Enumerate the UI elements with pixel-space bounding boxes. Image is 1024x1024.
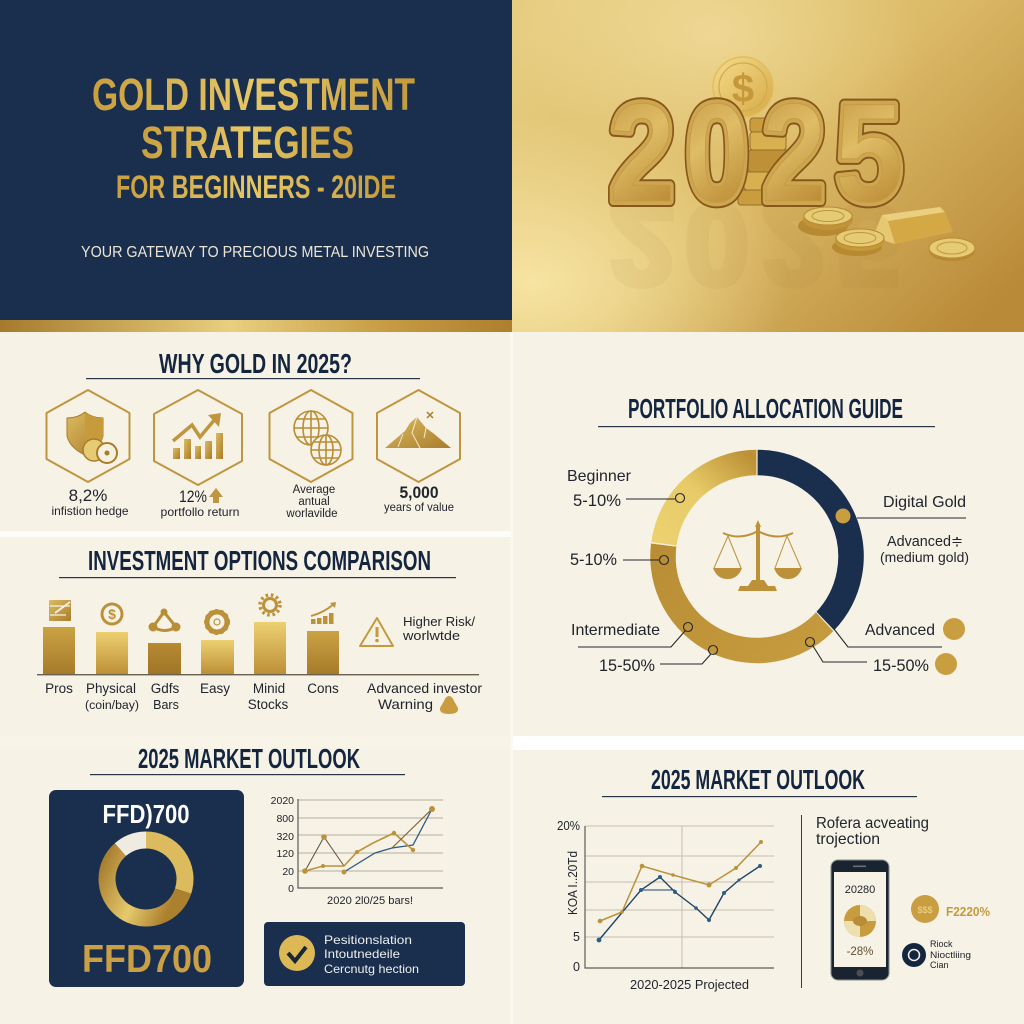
price card: FFD)700 [102, 799, 190, 829]
risk note: worlwtde [402, 628, 460, 643]
line chart [271, 795, 443, 907]
icon: dollar coin: $ [732, 67, 754, 111]
stat: years of value [384, 483, 454, 514]
icon: warning triangle [360, 618, 393, 646]
position callout: Cercnutg hection [324, 962, 419, 976]
stat: portfolio return: portfollo return [160, 505, 240, 519]
reflection of 2025 [609, 180, 903, 308]
icon: globes hexagon [270, 390, 352, 482]
projection note [816, 815, 929, 848]
icon: growth chart hexagon [154, 390, 242, 485]
title: GOLD INVESTMENT [92, 69, 415, 120]
price card: FFD700 [82, 938, 212, 981]
callouts left [578, 494, 718, 664]
stat: worldwide [285, 484, 338, 520]
icon: gold coin stat: $$$ [917, 905, 933, 915]
position callout: Pesitionslation [324, 933, 412, 947]
2025 numerals: 0 [685, 74, 749, 231]
line chart: 320 [276, 831, 294, 843]
2025 numerals: 0 [685, 74, 749, 231]
icon: note [49, 600, 71, 621]
2025 numerals: 5 [835, 74, 903, 231]
2025 numerals: 0 [685, 74, 749, 231]
stat: years of value: years of value [384, 500, 454, 514]
bar labels: Gdfs [151, 681, 180, 696]
2025 numerals: 5 [835, 74, 903, 231]
line chart: 2020 [271, 795, 294, 807]
callouts right [806, 518, 966, 662]
stat: worldwide: Average [293, 484, 335, 496]
reflection of 2025: 0 [685, 180, 749, 308]
donut chart [650, 449, 851, 650]
panel: title banner [0, 0, 512, 332]
icon: up arrow [209, 488, 223, 503]
2025 numerals: 2 [762, 74, 826, 231]
line chart: 2020-2025 Projected [630, 977, 749, 992]
2025 numerals: 2 [609, 74, 675, 231]
warning note: Warning [378, 696, 433, 712]
bar labels: Stocks [248, 697, 289, 712]
line chart: 800 [276, 813, 294, 825]
panel: market outlook left [49, 743, 465, 987]
panel: portfolio allocation guide: Advanced [865, 622, 935, 639]
heading: 2025 MARKET OUTLOOK [651, 764, 865, 795]
icon: risk ring: Cian [930, 960, 949, 970]
title: STRATEGIES [141, 117, 354, 168]
warning note [367, 680, 482, 714]
line chart [557, 819, 774, 992]
subtitle: YOUR GATEWAY TO PRECIOUS METAL INVESTING [81, 244, 429, 261]
stat: portfolio return: 12% [179, 487, 207, 506]
title [92, 69, 415, 205]
bar labels: (coin/bay) [85, 700, 139, 712]
icon: phone [831, 860, 889, 980]
position callout: Intoutnedeile [324, 947, 400, 961]
panel: market outlook right [557, 764, 990, 992]
icon: risk ring: Riock [930, 939, 953, 949]
icon: coin stack [738, 118, 790, 205]
panel: portfolio allocation guide: 5-10% [570, 550, 617, 569]
icon: risk ring: Nioctliing [930, 950, 971, 960]
risk note: Higher Risk/ [403, 614, 475, 629]
reflection of 2025: 2 [762, 180, 826, 308]
heading: WHY GOLD IN 2025? [159, 348, 352, 379]
reflection of 2025: 5 [835, 180, 903, 308]
panel: portfolio allocation guide: 5-10% [573, 491, 621, 510]
bar labels: Pros [45, 681, 73, 696]
line chart: 20% [557, 819, 580, 833]
2025 numerals: 2 [609, 74, 675, 231]
icon: sun gear [260, 595, 280, 615]
title: FOR BEGINNERS - 20IDE [116, 169, 396, 205]
panel: portfolio allocation guide: Intermediate [571, 622, 660, 639]
panel: portfolio allocation guide: Advanced≑ [887, 533, 963, 550]
icon: coins and gold bar [798, 207, 975, 261]
icon: phone: -28% [847, 946, 873, 958]
icon: risk ring [902, 939, 971, 970]
icon: dollar coin [713, 57, 773, 117]
warning note: Advanced investor [367, 680, 482, 696]
bar labels: Minid [253, 681, 285, 696]
bar labels [45, 681, 339, 712]
risk note [402, 614, 475, 643]
icon: shield and coin hexagon [46, 390, 130, 482]
bar labels: Bars [153, 698, 179, 712]
panel: why gold in 2025 [46, 348, 460, 520]
stat: inflation hedge: infistion hedge [52, 504, 129, 518]
bar chart [37, 622, 479, 675]
2025 numerals [609, 74, 903, 231]
line chart: 2020 2l0/25 bars! [327, 895, 413, 907]
stat: worldwide: worlavilde [285, 508, 338, 520]
stat: worldwide: antual [298, 496, 330, 508]
line chart: 5 [573, 930, 580, 944]
line chart: KOA I..20Td [566, 851, 580, 915]
icon: dollar coin outline [102, 604, 122, 624]
reflection of 2025: 2 [609, 180, 675, 308]
bar labels: Physical [86, 681, 136, 696]
stat: portfolio return [160, 487, 240, 519]
bar labels: Cons [307, 681, 339, 696]
panel: portfolio allocation guide: Beginner [567, 468, 632, 485]
line chart: 20 [282, 866, 294, 878]
2025 numerals: 2 [762, 74, 826, 231]
2025 numerals: 2 [609, 74, 675, 231]
icon: check badge [279, 935, 315, 971]
panel: portfolio allocation guide: 15-50% [873, 656, 929, 675]
2025 numerals: 2 [762, 74, 826, 231]
icon: gold coin stat [911, 895, 990, 923]
donut chart [107, 840, 185, 918]
projection note: trojection [816, 831, 880, 848]
bar labels: Easy [200, 681, 230, 696]
projection note: Rofera acveating [816, 815, 929, 832]
icon: ornate ring [150, 610, 179, 630]
line chart: 120 [276, 848, 294, 860]
heading: 2025 MARKET OUTLOOK [138, 743, 360, 774]
panel: portfolio allocation guide: Digital Gold [883, 494, 966, 511]
gold strip [0, 320, 512, 332]
icon: gear [205, 610, 229, 634]
panel: portfolio allocation guide: 15-50% [599, 656, 655, 675]
heading: INVESTMENT OPTIONS COMPARISON [88, 545, 431, 576]
icon: dollar coin outline: $ [108, 606, 116, 622]
line chart: 0 [288, 883, 294, 895]
price card [49, 790, 244, 987]
icon: rising bars [311, 602, 336, 624]
icon: phone: 20280 [845, 884, 875, 896]
icon: gold coin stat: F2220% [946, 904, 990, 919]
panel: portfolio allocation guide: (medium gold) [880, 549, 969, 565]
stat: inflation hedge: 8,2% [69, 486, 107, 505]
stat: years of value: 5,000 [400, 483, 438, 502]
panel: investment options comparison [37, 545, 482, 714]
position callout [264, 922, 465, 986]
icon: balance scale [713, 520, 802, 591]
icon: warning badge [440, 696, 458, 714]
line chart: 0 [573, 960, 580, 974]
panel: portfolio allocation guide [567, 393, 969, 675]
icon: mountain hexagon [377, 390, 460, 482]
panel: 2025 gold hero [512, 0, 1024, 332]
stat: inflation hedge [52, 486, 129, 518]
2025 numerals: 5 [835, 74, 903, 231]
